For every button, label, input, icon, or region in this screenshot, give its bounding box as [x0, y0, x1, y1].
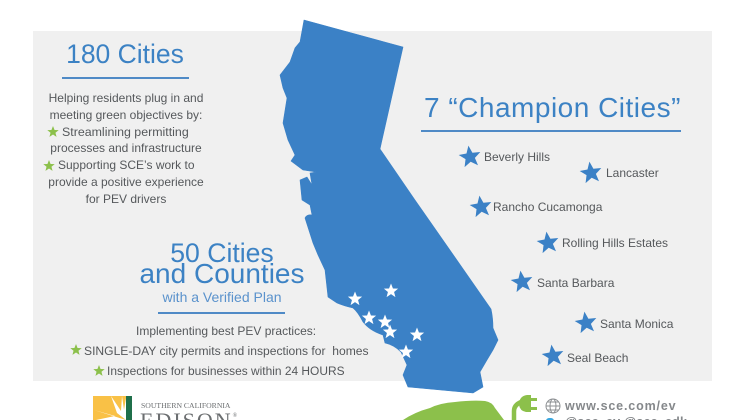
heading: 180 Cities: 180 Cities	[66, 39, 184, 69]
text: 180 Cities description: provide a positive experience	[48, 175, 204, 189]
text: website: www.sce.com/ev	[565, 399, 676, 413]
text: Southern California: SOUTHERN CALIFORNIA	[141, 401, 230, 410]
panel: grey background	[33, 31, 712, 381]
heading: 50 Cities and Counties: and Counties	[139, 258, 304, 288]
white stars on map	[348, 284, 424, 358]
divider	[421, 130, 681, 132]
city: Lancaster: Lancaster	[606, 166, 659, 180]
text: 180 Cities description: Streamlining permitting	[62, 125, 189, 139]
city: Rancho Cucamonga: Rancho Cucamonga	[493, 200, 602, 214]
city: Santa Barbara: Santa Barbara	[537, 276, 614, 290]
city: Beverly Hills: Beverly Hills	[484, 150, 550, 164]
heading: 7 Champion Cities: 7 “Champion Cities”	[424, 92, 681, 123]
text: 180 Cities description: for PEV drivers	[86, 192, 166, 206]
icon: sun square	[93, 396, 132, 420]
heading: 50 Cities and Counties: 50 Cities	[170, 238, 274, 268]
city: Santa Monica: Santa Monica	[600, 317, 673, 331]
text: 180 Cities description: Helping residents plug in and	[49, 91, 203, 105]
text: implementing best practices: Implementing best PEV practices:	[136, 324, 316, 338]
text: 180 Cities description: processes and infrastructure	[50, 141, 202, 155]
city: Rolling Hills Estates: Rolling Hills Estates	[562, 236, 668, 250]
text: implementing best practices: SINGLE-DAY city permits and inspections for homes	[84, 344, 369, 358]
city: Seal Beach: Seal Beach	[567, 351, 628, 365]
divider	[158, 312, 285, 314]
text: 180 Cities description: Supporting SCE’s work to	[58, 158, 195, 172]
text: implementing best practices	[84, 324, 369, 378]
icon: bird dot	[546, 418, 554, 420]
logo: Southern California Edison	[93, 396, 239, 420]
text: implementing best practices: Inspections for businesses within 24 HOURS	[107, 364, 345, 378]
divider	[62, 77, 189, 78]
heading: 50 Cities and Counties	[139, 238, 304, 288]
text: 180 Cities description	[48, 91, 204, 206]
text: 180 Cities description: meeting green objectives by:	[50, 108, 202, 122]
subheading: with a Verified Plan: with a Verified Plan	[162, 289, 282, 305]
